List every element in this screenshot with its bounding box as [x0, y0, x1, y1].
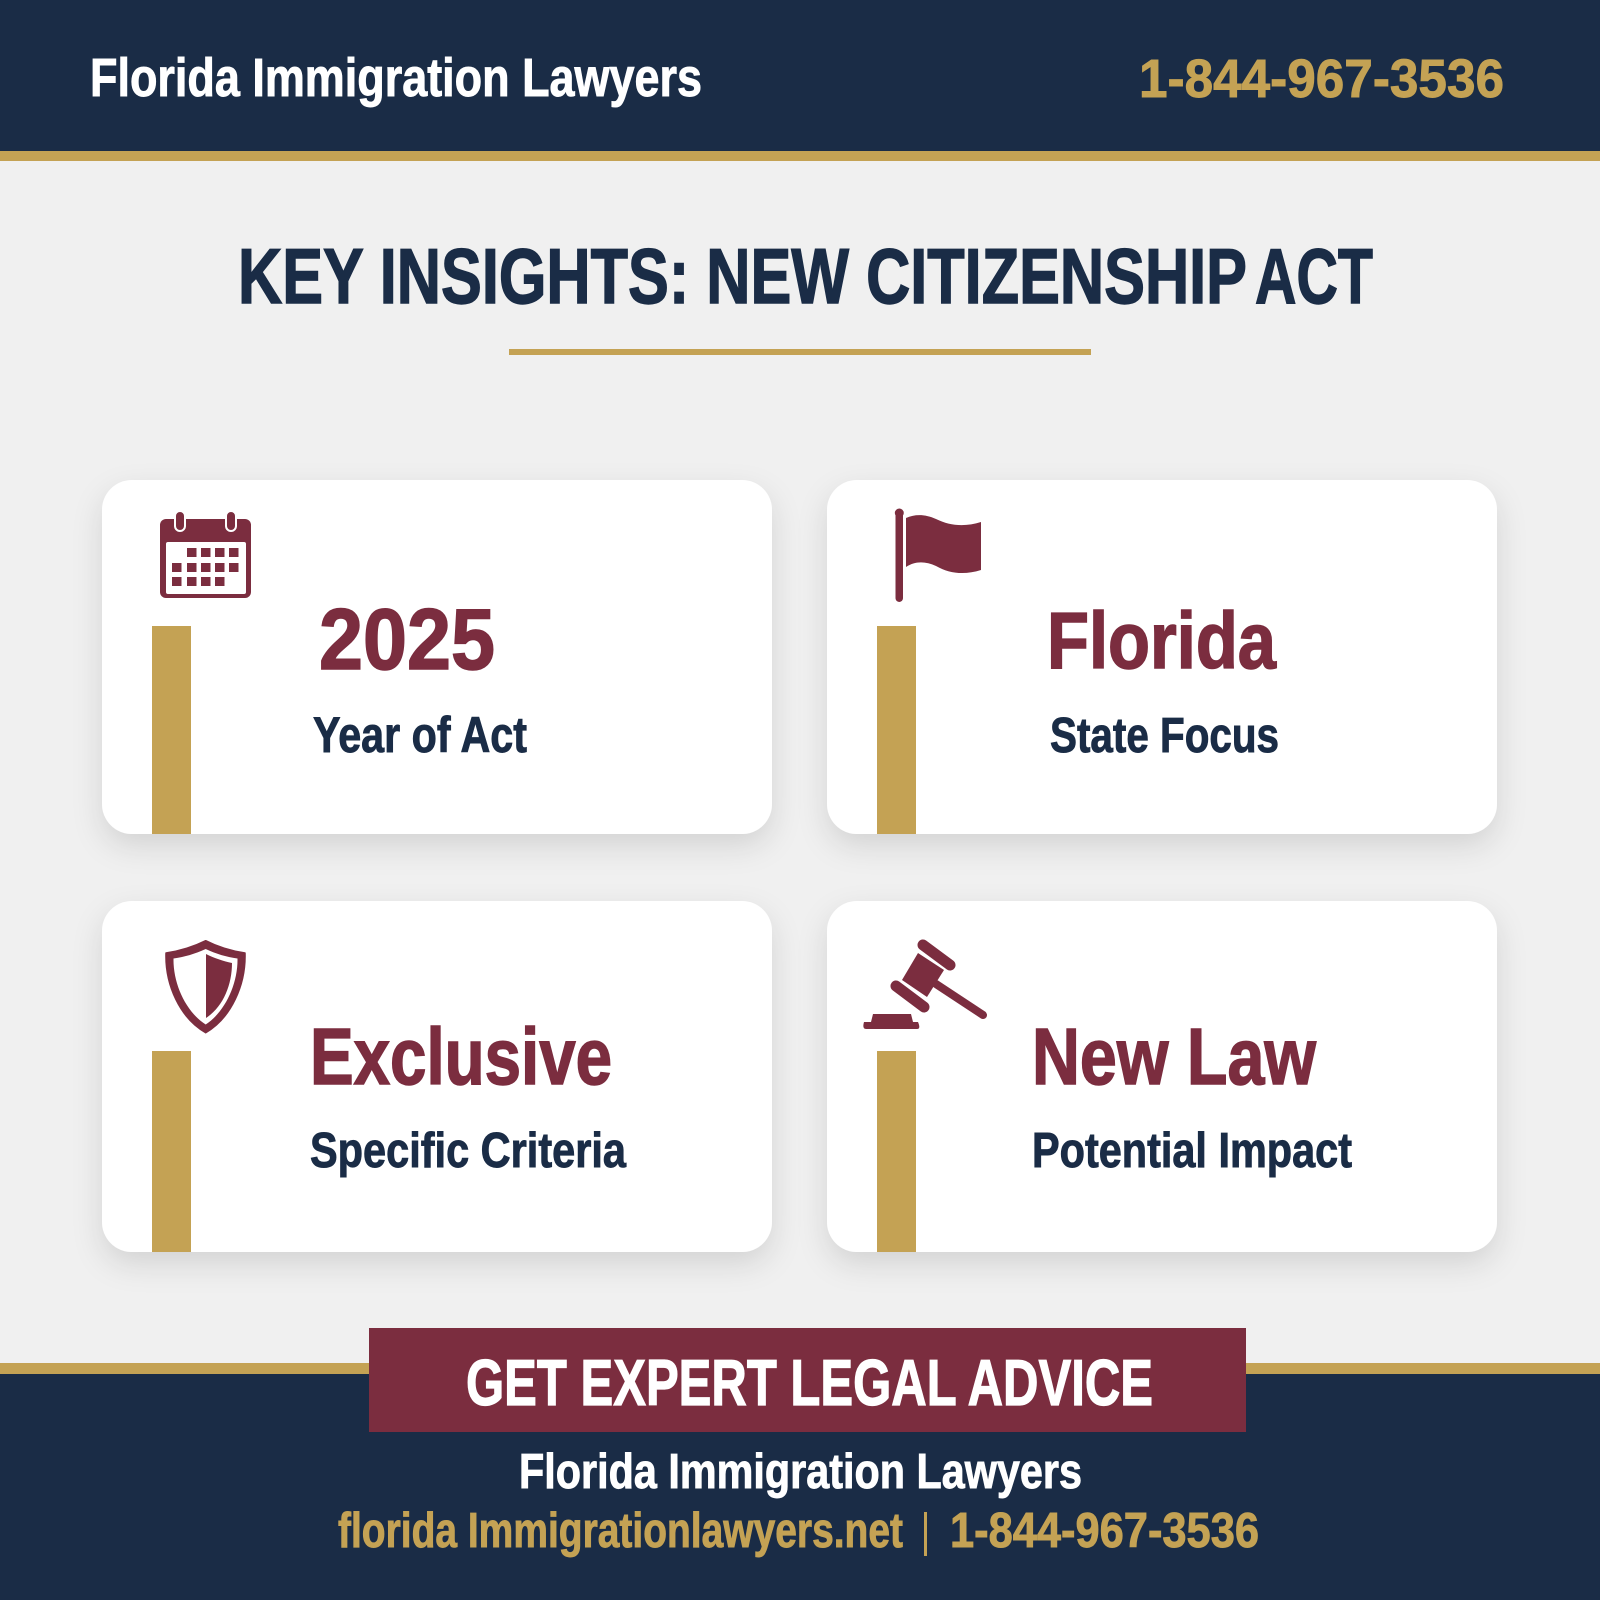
- icon: calendar: [160, 511, 251, 598]
- stat label: Potential Impact: [1032, 1124, 1352, 1178]
- stat label: Year of Act: [313, 707, 527, 763]
- icon: flag: [895, 508, 981, 602]
- header phone number: 1-844-967-3536: [1139, 49, 1504, 109]
- footer contact line: florida Immigrationlawyers.net: [338, 1504, 903, 1558]
- icon: gavel: [863, 945, 983, 1029]
- call to action banner: [369, 1328, 1246, 1432]
- panel: exclusive specific criteria: [102, 901, 772, 1252]
- gold bar: [152, 1051, 191, 1252]
- stat label: State Focus: [1050, 709, 1279, 763]
- footer firm name: Florida Immigration Lawyers: [519, 1445, 1082, 1499]
- title underline: [509, 349, 1091, 355]
- panel: new law potential impact: [827, 901, 1497, 1252]
- footer contact line: 1-844-967-3536: [950, 1504, 1259, 1558]
- panel: 2025 year of act: [102, 480, 772, 834]
- gold bar: [152, 626, 191, 834]
- header bar: [0, 0, 1600, 161]
- stat label: Specific Criteria: [310, 1124, 627, 1178]
- call to action banner: GET EXPERT LEGAL ADVICE: [466, 1346, 1153, 1419]
- stat value: New Law: [1032, 1012, 1317, 1101]
- title: KEY INSIGHTS: NEW CITIZENSHIP: [238, 232, 1247, 320]
- stat value: Florida: [1047, 596, 1276, 685]
- gold bar: [877, 626, 916, 834]
- stat value: 2025: [319, 592, 495, 688]
- stat value: Exclusive: [310, 1012, 612, 1101]
- gold bar: [877, 1051, 916, 1252]
- panel: florida state focus: [827, 480, 1497, 834]
- footer bar: [0, 1328, 1600, 1600]
- header firm name: Florida Immigration Lawyers: [90, 48, 702, 108]
- title: ACT: [1255, 232, 1373, 320]
- icon: shield: [166, 941, 245, 1033]
